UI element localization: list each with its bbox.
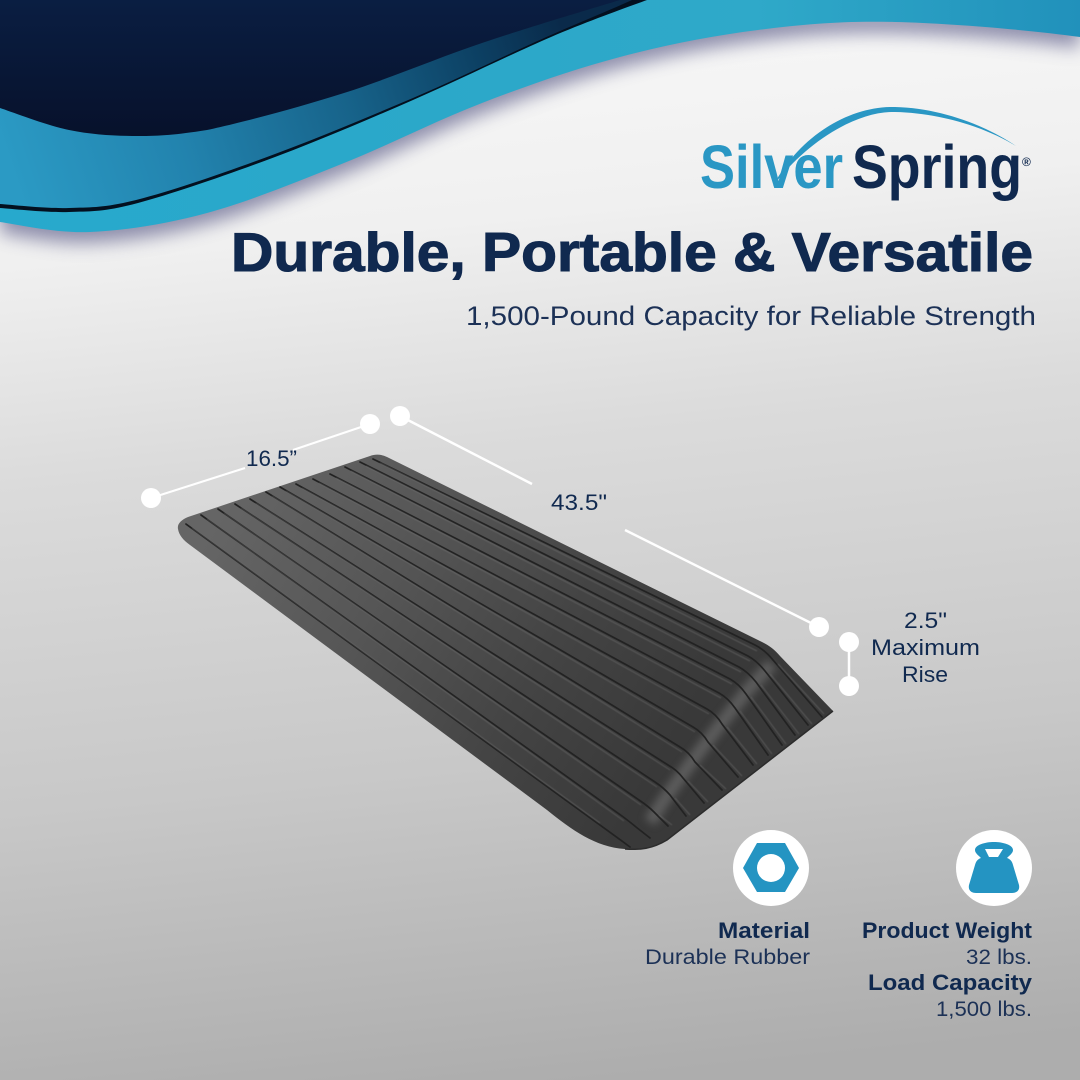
text: material: Durable Rubber xyxy=(645,946,810,969)
icon: kettlebell weight xyxy=(956,830,1032,906)
header wave xyxy=(0,0,1080,243)
dimension: maximum rise: Maximum xyxy=(871,635,980,660)
text: weight and capacity xyxy=(862,918,1033,1021)
icon: hex nut xyxy=(733,830,809,906)
title: Durable, Portable & Versatile xyxy=(231,221,1033,283)
dimension: maximum rise xyxy=(839,608,980,696)
text: material xyxy=(645,918,810,969)
dimension: length 43.5 xyxy=(390,406,829,637)
ramp front edge xyxy=(625,711,833,849)
dimension: maximum rise: 2.5" xyxy=(904,608,947,633)
text: weight and capacity: 1,500 lbs. xyxy=(936,998,1032,1021)
ramp body xyxy=(178,455,833,849)
text: material: Material xyxy=(718,918,810,943)
product: rubber threshold ramp xyxy=(178,455,833,849)
logo swoosh arc xyxy=(773,107,1016,186)
logo: SilverSpring: Spring xyxy=(852,133,1022,201)
logo wordmark: Silver xyxy=(700,133,843,201)
subtitle: 1,500-Pound Capacity for Reliable Strength xyxy=(466,301,1036,331)
dimension: length 43.5: 43.5" xyxy=(551,490,607,515)
dimension: width 16.5: 16.5” xyxy=(246,446,297,471)
groove highlights xyxy=(192,463,824,825)
dimension: maximum rise: Rise xyxy=(902,662,948,687)
ramp grooves xyxy=(186,459,822,847)
text: weight and capacity: Load Capacity xyxy=(868,970,1033,995)
dimension: width 16.5 xyxy=(141,414,380,508)
text: weight and capacity: Product Weight xyxy=(862,918,1033,943)
text: weight and capacity: 32 lbs. xyxy=(966,946,1032,969)
logo: SilverSpring: ® xyxy=(1022,155,1031,169)
ramp front bevel highlight xyxy=(650,664,772,822)
logo: SilverSpring xyxy=(700,107,1031,201)
